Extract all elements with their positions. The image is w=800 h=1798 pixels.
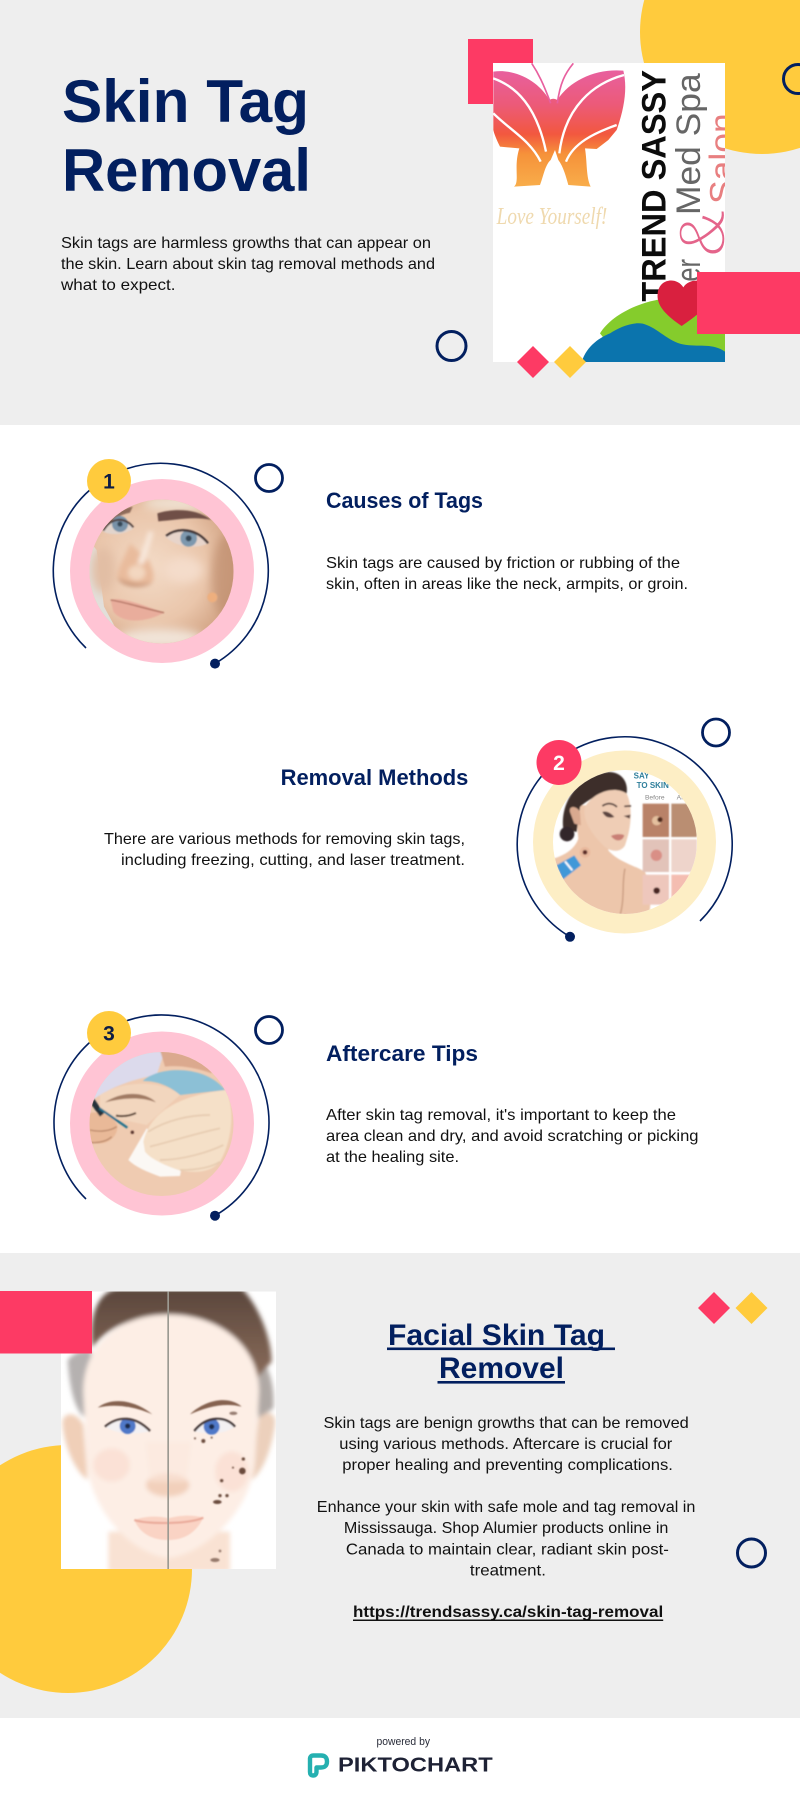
hair [563,772,627,832]
divider line [167,1292,169,1569]
gloved hand [143,1090,231,1172]
text block promotion: Mississauga. Shop Alumier products online in [344,1520,668,1537]
forehead [100,1084,180,1125]
decorative yellow circle bottom left [0,1445,192,1693]
yellow diamond bottom [736,1292,768,1324]
image caption: SAY [634,772,650,781]
end dot 2 [565,932,575,942]
text block summary: proper healing and preventing complications. [342,1457,673,1474]
tagline: Love Yourself! [496,203,607,230]
heading facial skin tag removel: Facial Skin Tag [388,1319,605,1352]
panel: header background [0,0,800,425]
brows and eyes [602,804,631,807]
right brow [157,510,211,521]
yellow diamond [554,346,586,378]
image caption: TO SKIN [637,781,669,790]
image caption [634,772,682,800]
panel: step 3 aftercare [54,1011,698,1221]
needle tool [92,1098,104,1117]
badge 3 [87,1011,131,1055]
closed eye lashes [116,1113,136,1116]
intro text: Skin tags are harmless growths that can appear on [61,235,431,252]
right eye [194,1420,235,1434]
left eye [103,520,133,534]
left fingers [88,1112,117,1143]
nose softened [117,532,154,586]
footer: powered by piktochart [310,1736,493,1776]
intro text: what to expect. [60,277,176,294]
text aftercare: at the healing site. [326,1149,459,1166]
powered by label: powered by [376,1736,430,1748]
outline circle top right [784,64,800,94]
title: Removal [62,137,311,204]
brand name rotated: TREND SASSY [635,70,673,302]
photo: aftercare treatment [90,1052,234,1196]
text block summary [324,1415,689,1474]
pink square behind logo [468,39,533,104]
outline circle 3 [256,1016,282,1044]
heading aftercare: Aftercare Tips [326,1041,478,1066]
panel: step 1 causes [53,459,688,669]
pink rectangle over photo [0,1291,92,1354]
text removal methods: including freezing, cutting, and laser treatment. [121,852,465,869]
lips [611,834,624,840]
face [584,790,631,851]
skin tag [207,592,217,602]
salon rotated: Salon [703,113,741,204]
left eye [105,1420,150,1434]
badge 3: 3 [103,1022,115,1046]
heart [658,280,697,326]
heading facial skin tag removel: Removel [439,1352,564,1385]
piktochart wordmark: PIKTOCHART [338,1754,493,1776]
outline circle [437,332,466,360]
eyebrow [105,1094,156,1102]
icon: piktochart logo [310,1756,327,1776]
lips [111,599,164,621]
image: Trend Sassy logo [493,63,741,362]
text aftercare: After skin tag removal, it's important to keep the [326,1107,676,1124]
outline circle bottom [738,1539,766,1567]
text removal methods [104,831,465,869]
pink ring 1 [70,479,254,663]
text block summary: using various methods. Aftercare is crucial for [339,1436,673,1453]
badge 1 [87,459,131,503]
text removal methods: There are various methods for removing skin tags, [104,831,465,848]
end dot 1 [210,659,220,669]
text causes: skin, often in areas like the neck, armpits, or groin. [326,576,688,593]
text aftercare: area clean and dry, and avoid scratching or picking [326,1128,698,1145]
image caption: Before [645,795,665,802]
orbit arc 3 [54,1015,269,1216]
decorative yellow circle top right [640,0,800,154]
photo: face with skin tag [90,500,234,644]
device [556,855,581,879]
person behind [160,1050,212,1073]
grid photos [643,804,669,837]
text block summary: Skin tags are benign growths that can be removed [324,1415,689,1432]
heading facial skin tag removel [387,1319,615,1385]
neck mole [580,848,590,858]
spot [131,1131,134,1134]
globe [582,298,725,362]
end dot 3 [210,1211,220,1221]
right eye [165,531,208,547]
badge 2: 2 [553,752,565,775]
moles [194,1412,246,1562]
brows [98,1400,242,1414]
text block promotion: Canada to maintain clear, radiant skin post- [346,1542,669,1558]
pink ring 3 [70,1032,254,1216]
hair shadow [103,507,133,528]
gauze [128,1128,183,1177]
link text: https://trendsassy.ca/skin-tag-removal [353,1604,663,1621]
text block promotion: treatment. [470,1562,546,1580]
shoulder and neck [553,805,651,919]
outline circle 2 [702,719,730,746]
text block promotion [317,1499,695,1580]
ampersand rotated: & [666,209,740,257]
intro text: the skin. Learn about skin tag removal methods and [61,256,435,273]
text block promotion: Enhance your skin with safe mole and tag removal in [317,1499,695,1516]
lips [134,1516,203,1540]
orbit arc 2 [517,737,732,937]
heading removal methods: Removal Methods [281,765,468,790]
outline circle 1 [256,464,282,492]
panel: facial skin tag removel background [0,1253,800,1718]
photo: half and half face [61,1288,276,1572]
heading causes: Causes of Tags [326,488,483,513]
butterfly wings [493,63,625,187]
pink diamond bottom [698,1292,730,1324]
panel: step 2 removal methods [104,719,732,942]
photo: woman and before-after grid [553,770,697,914]
title: Skin Tag [62,68,309,135]
badge 2 [536,740,582,785]
text causes: Skin tags are caused by friction or rubbing of the [326,555,680,572]
lavender background [94,1052,163,1101]
orbit arc 1 [53,463,268,664]
badge 1: 1 [103,470,115,494]
hair and head soft layer [62,1288,275,1572]
cream ring 2 [533,750,716,934]
pink diamond [517,346,549,378]
text causes [326,555,688,593]
intro text [60,235,435,294]
pink rectangle over logo [697,272,800,334]
image caption: After [677,795,692,802]
title [62,68,311,204]
er fragment rotated: er [670,259,708,282]
text aftercare [326,1107,698,1166]
med spa rotated: Med Spa [670,73,708,215]
blue cap [143,1070,225,1095]
